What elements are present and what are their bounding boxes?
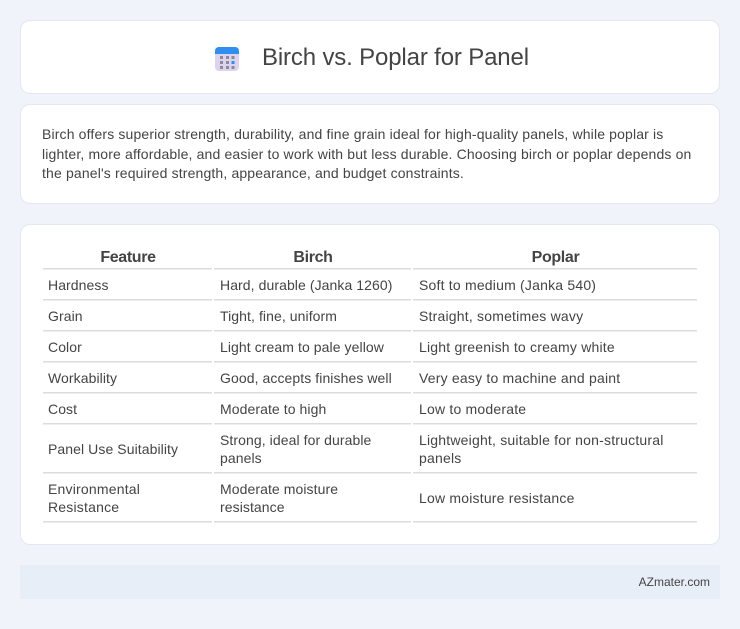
row: environmental resistance: Low moisture resistance bbox=[419, 490, 575, 506]
row: cost: Cost bbox=[48, 401, 77, 417]
summary text bbox=[42, 126, 691, 181]
row: grain: Straight, sometimes wavy bbox=[419, 308, 583, 324]
row: panel use suitability: Lightweight, suitable for non-structural bbox=[419, 432, 664, 448]
row: panel use suitability: Strong, ideal for durable bbox=[220, 432, 371, 448]
row: color: Light greenish to creamy white bbox=[419, 339, 615, 355]
row: hardness: Hardness bbox=[48, 277, 109, 293]
row: workability: Good, accepts finishes well bbox=[220, 370, 392, 386]
row: color bbox=[48, 339, 615, 355]
icon: calendar bbox=[215, 47, 239, 71]
row: cost bbox=[48, 401, 526, 417]
panel: summary bbox=[20, 104, 720, 204]
row: environmental resistance: Resistance bbox=[48, 499, 119, 515]
row: environmental resistance: Environmental bbox=[48, 481, 140, 497]
summary text: lighter, more affordable, and easier to work with but less durable. Choosing birch or poplar depends on bbox=[42, 146, 691, 162]
row: cost: Moderate to high bbox=[220, 401, 326, 417]
row: grain: Tight, fine, uniform bbox=[220, 308, 337, 324]
row: workability bbox=[48, 370, 620, 386]
row: hardness: Soft to medium (Janka 540) bbox=[419, 277, 596, 293]
row: hardness bbox=[48, 277, 596, 293]
row: panel use suitability: panels bbox=[220, 450, 262, 466]
row: color: Light cream to pale yellow bbox=[220, 339, 384, 355]
title: Birch vs. Poplar for Panel bbox=[262, 44, 529, 71]
row: panel use suitability: Panel Use Suitability bbox=[48, 441, 178, 457]
row: cost: Low to moderate bbox=[419, 401, 526, 417]
row: grain: Grain bbox=[48, 308, 83, 324]
table header: Feature bbox=[100, 249, 156, 266]
panel: comparison table bbox=[20, 224, 720, 545]
row: environmental resistance: resistance bbox=[220, 499, 285, 515]
row: environmental resistance: Moderate moisture bbox=[220, 481, 338, 497]
summary text: Birch offers superior strength, durability, and fine grain ideal for high-quality panels, while poplar is bbox=[42, 126, 663, 142]
table header bbox=[100, 249, 580, 266]
footer bar bbox=[20, 565, 720, 599]
panel: title card bbox=[20, 20, 720, 94]
row: workability: Workability bbox=[48, 370, 117, 386]
table header: Poplar bbox=[532, 249, 579, 266]
row: grain bbox=[48, 308, 584, 324]
table header: Birch bbox=[293, 249, 333, 266]
row: panel use suitability bbox=[48, 432, 664, 466]
row: panel use suitability: panels bbox=[419, 450, 461, 466]
row: color: Color bbox=[48, 339, 82, 355]
summary text: the panel's required strength, appearance, and budget constraints. bbox=[42, 165, 464, 181]
row: environmental resistance bbox=[48, 481, 575, 515]
footer source text: AZmater.com bbox=[639, 575, 710, 589]
row: workability: Very easy to machine and paint bbox=[419, 370, 620, 386]
row: hardness: Hard, durable (Janka 1260) bbox=[220, 277, 393, 293]
